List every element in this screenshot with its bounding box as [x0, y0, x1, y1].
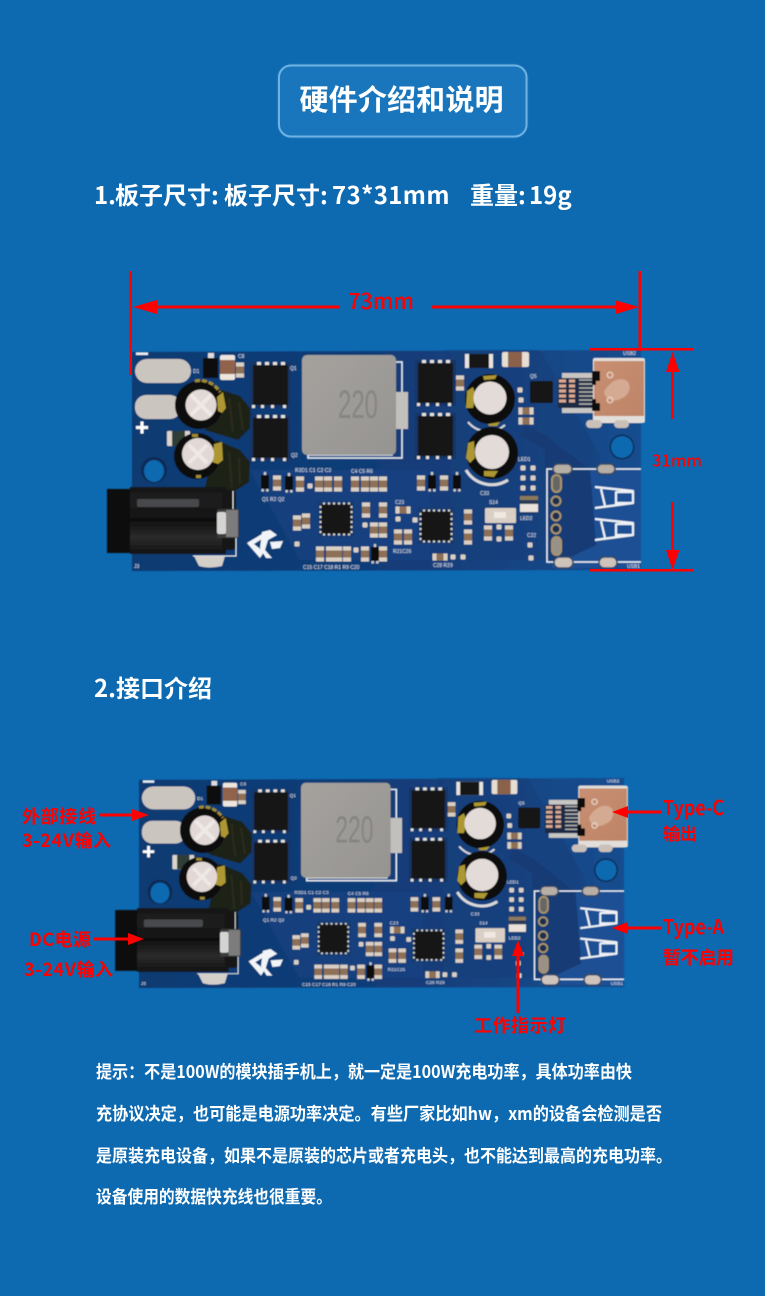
- USB Type-C connector: [558, 358, 645, 428]
- callout: external wiring input: [22, 803, 149, 853]
- callout: work indicator light: [474, 940, 566, 1038]
- silkscreen labels: C15 C17 C18 R1 R9 C20: [303, 565, 360, 571]
- text block: usage tips: 充协议决定，也可能是电源功率决定。有些厂家比如hw，xm的设备会检测是否: [96, 1101, 662, 1126]
- callout: work indicator light: 工作指示灯: [474, 1012, 566, 1038]
- diode and capacitor top left: [203, 353, 244, 380]
- text block: usage tips: 设备使用的数据快充线也很重要。: [96, 1184, 332, 1209]
- LED indicator LED2: [520, 495, 538, 513]
- input solder pads: [135, 352, 191, 434]
- silkscreen labels: C8: [238, 354, 245, 360]
- text block: usage tips: 是原装充电设备，如果不是原装的芯片或者充电头，也不能达到最高的充电功率。: [96, 1143, 672, 1168]
- MOSFET Q1: [250, 362, 291, 408]
- callout: Type-A disabled: [612, 911, 734, 970]
- silkscreen labels: LED2: [520, 516, 533, 522]
- power inductor 220: 220: [338, 383, 378, 427]
- silkscreen labels: C33: [480, 491, 489, 497]
- DC power jack: [107, 487, 239, 568]
- silkscreen labels: C23: [395, 500, 404, 506]
- callout: DC power input: [24, 926, 144, 982]
- silkscreen labels: Q1 R2 Q2: [262, 497, 285, 503]
- MOSFET Q3: [415, 360, 456, 406]
- silkscreen labels: R3D1 C1 C2 C3: [295, 468, 331, 474]
- 73mm label: 73mm: [348, 284, 414, 316]
- electrolytic capacitor C3: [465, 374, 515, 431]
- callout: external wiring input: 外部接线: [22, 803, 96, 829]
- photo: circuit board top view: [107, 350, 645, 571]
- silkscreen labels: [134, 351, 640, 571]
- MOSFET Q2: [250, 415, 291, 461]
- text block: usage tips: [96, 1059, 672, 1209]
- silkscreen labels: C4 C5 R6: [351, 469, 373, 475]
- USB Type-A footprint: [547, 464, 641, 568]
- text block: usage tips: 提示：不是100W的模块插手机上，就一定是100W充电功率，具体功率由快: [96, 1059, 632, 1084]
- silkscreen labels: S14: [489, 500, 498, 506]
- dimension: 31mm height: [590, 348, 702, 572]
- heading: board size: 重量: [470, 176, 518, 211]
- electrolytic capacitor C4: [466, 427, 518, 485]
- silkscreen labels: D1: [193, 369, 200, 375]
- callout: Type-A disabled: 暂不启用: [663, 944, 734, 970]
- controller chip U2: [418, 508, 454, 544]
- silkscreen labels: Q2: [291, 453, 298, 459]
- fuse F1: [167, 431, 190, 446]
- silkscreen labels: LED1: [518, 457, 531, 463]
- heading: board size: 19g: [529, 176, 572, 211]
- silkscreen labels: Q1: [290, 366, 297, 372]
- dimension: 73mm width: [130, 271, 641, 375]
- callout: Type-C output: 输出: [663, 820, 697, 845]
- board substrate: [132, 350, 641, 571]
- power inductor 220: [302, 355, 408, 458]
- silkscreen labels: R21C26: [393, 549, 412, 555]
- protocol chip Q5: [530, 381, 553, 403]
- electrolytic capacitor C1: [175, 380, 252, 440]
- resistor and capacitor top right: [465, 352, 529, 368]
- title text: 硬件介绍和说明: [300, 77, 504, 119]
- callout: external wiring input: 3-24V输入: [22, 827, 111, 853]
- electrolytic capacitor C2: [174, 433, 250, 493]
- callout: Type-C output: Type-C: [663, 792, 724, 821]
- silkscreen labels: USB2: [623, 351, 636, 357]
- mounting hole left: [141, 457, 167, 483]
- heading: board size: :: [211, 176, 219, 211]
- callout: DC power input: 3-24V输入: [24, 956, 113, 982]
- heading: interface introduction: 2.: [94, 669, 116, 704]
- mounting hole right: [610, 434, 634, 460]
- 31mm label: 31mm: [652, 448, 702, 472]
- heading: interface introduction: 接口介绍: [116, 669, 212, 704]
- silkscreen labels: C28 R29: [433, 563, 453, 569]
- heading: board size: :: [320, 176, 328, 211]
- silkscreen labels: USB1: [627, 564, 640, 570]
- push switch S14: [485, 508, 516, 523]
- callout: Type-A disabled: Type-A: [663, 911, 724, 940]
- photo: circuit board with interface labels: [115, 778, 628, 988]
- MOSFET Q4: [415, 413, 456, 459]
- silkscreen labels: C22: [527, 533, 536, 539]
- board logo: [247, 530, 283, 558]
- controller chip U1: [318, 501, 354, 537]
- title badge: [278, 65, 527, 137]
- heading: board size: 板子尺寸: [224, 176, 320, 211]
- silkscreen labels: Q5: [530, 374, 537, 380]
- callout: Type-C output: [612, 792, 724, 845]
- heading: board size: 1.: [94, 176, 116, 211]
- callout: DC power input: DC电源: [29, 926, 91, 952]
- small components row: [261, 376, 536, 564]
- silkscreen labels: J3: [134, 564, 140, 570]
- heading: board size: :: [518, 176, 526, 211]
- heading: board size: 板子尺寸: [115, 176, 211, 211]
- heading: board size: 73*31mm: [332, 176, 450, 211]
